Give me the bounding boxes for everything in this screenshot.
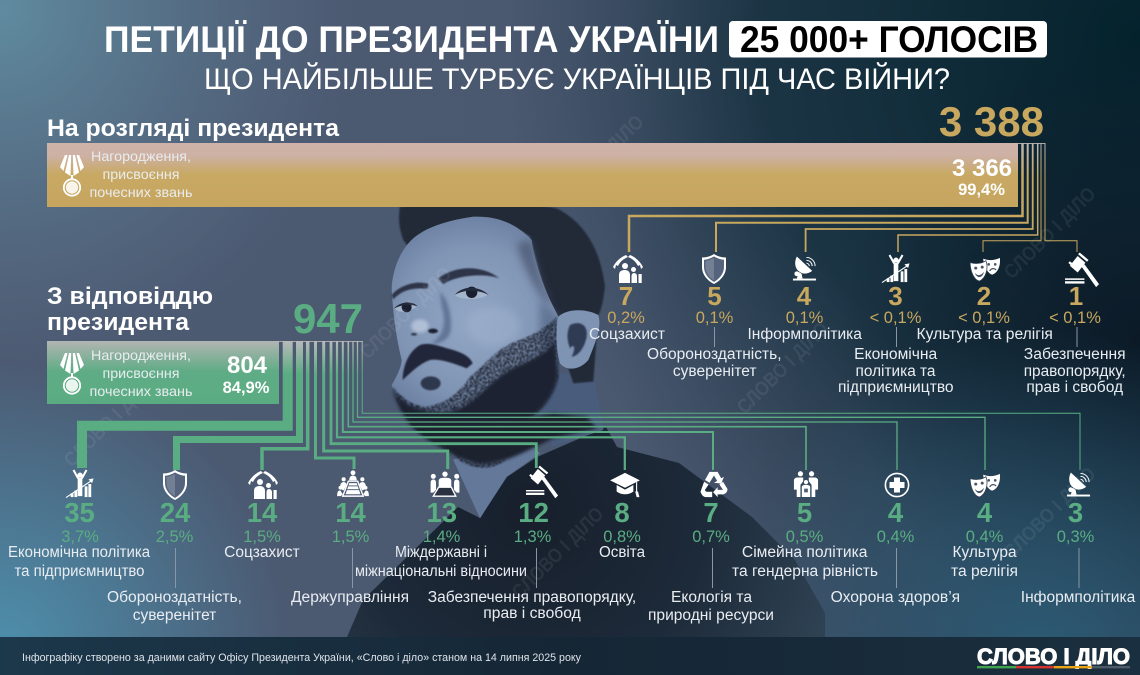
column: ecology: Екологія та	[671, 589, 752, 606]
column: education	[599, 473, 645, 561]
column: social protection (answered): 1,5%	[243, 528, 281, 546]
icon: satellite dish	[1067, 472, 1090, 496]
column: healthcare	[831, 473, 960, 606]
column: ecology	[648, 472, 774, 624]
title	[104, 19, 1047, 60]
column: international relations: 13	[427, 497, 457, 528]
column: culture (answered)	[951, 474, 1018, 580]
bar value: 84,9%	[223, 379, 270, 397]
column: education: Освіта	[599, 544, 645, 561]
column: defence (answered): 2,5%	[156, 528, 194, 546]
column: education: 0,8%	[603, 528, 641, 546]
icon: medical cross	[885, 473, 909, 497]
source note: Інфографіку створено за даними сайту Офісу Президента України, «Слово і діло» станом на 14 липня 2025 року	[22, 652, 581, 664]
column: defence (answered): суверенітет	[133, 607, 216, 624]
bar value: 3 366	[952, 155, 1012, 182]
column: defence (review): суверенітет	[673, 363, 756, 380]
column: social protection (answered)	[224, 471, 300, 561]
icon: social protection	[613, 255, 643, 283]
icon: satellite dish	[793, 256, 816, 280]
column: family policy	[732, 471, 878, 580]
column: public administration: 14	[335, 497, 366, 528]
column: information policy (review)	[747, 256, 862, 343]
gold connector lines	[629, 143, 1077, 252]
column: culture (review)	[916, 258, 1053, 343]
column: social protection (answered): Соцзахист	[224, 544, 300, 561]
total under review: 3 388	[939, 98, 1044, 145]
column: law and order (review): прав і свобод	[1026, 379, 1123, 396]
column: education: 8	[614, 497, 630, 528]
column: information policy (answered): Інформполітика	[1021, 589, 1136, 606]
column: culture (answered): Культура	[952, 544, 1017, 561]
column: family policy: 0,5%	[786, 528, 824, 546]
total answered: 947	[293, 295, 363, 342]
green connector lines	[82, 341, 1080, 470]
column: law and order (answered): 12	[518, 497, 549, 528]
column: healthcare: 4	[888, 497, 904, 528]
column: family policy: та гендерна рівність	[732, 563, 878, 580]
bar label: присвоєння	[102, 166, 180, 182]
column: information policy (review): 0,1%	[786, 309, 824, 327]
column: international relations: Міждержавні і	[395, 544, 487, 561]
bar: awards under review	[47, 143, 1018, 207]
bar value	[223, 352, 270, 397]
icon: theatre masks	[970, 474, 1000, 497]
column: culture (answered): та релігія	[951, 563, 1018, 580]
subtitle: ЩО НАЙБІЛЬШЕ ТУРБУЄ УКРАЇНЦІВ ПІД ЧАС ВІЙНИ?	[204, 62, 950, 96]
column: social protection (answered): 14	[247, 497, 278, 528]
bar label: Нагородження,	[91, 347, 191, 363]
column: law and order (answered): прав і свобод	[483, 605, 581, 622]
column: economy (review): політика та	[856, 363, 936, 380]
footer	[0, 637, 1140, 675]
column: defence (review): 5	[707, 281, 722, 311]
icon: meeting	[431, 471, 459, 496]
icon: medal	[60, 155, 84, 196]
column: culture (review): Культура та релігія	[916, 326, 1053, 343]
title: ПЕТИЦІЇ ДО ПРЕЗИДЕНТА УКРАЇНИ	[104, 19, 719, 60]
icon: economy growth	[882, 255, 910, 283]
column: economy (answered): Економічна політика	[8, 544, 150, 561]
watermarks: СЛОВО І ДІЛО	[548, 111, 648, 212]
column: international relations: міжнаціональні відносини	[355, 563, 527, 580]
column: international relations	[355, 471, 527, 580]
column: economy (review): 3	[888, 281, 903, 311]
column: international relations: 1,4%	[423, 528, 461, 546]
column: information policy (review): 4	[797, 281, 812, 311]
title: 25 000+ ГОЛОСІВ	[740, 19, 1038, 60]
column: defence (review): Обороноздатність,	[647, 346, 782, 363]
column: law and order (review): Забезпечення	[1024, 346, 1126, 363]
column: economy (review): < 0,1%	[870, 309, 922, 327]
icon: graduation cap	[610, 473, 640, 497]
column: social protection (review): Соцзахист	[589, 326, 665, 343]
bar value: 804	[227, 352, 268, 379]
portrait of the president	[347, 203, 825, 637]
logo: СЛОВО І ДІЛО	[977, 644, 1130, 669]
icon: social protection	[248, 471, 278, 499]
column: healthcare: Охорона здоров’я	[831, 589, 960, 606]
heading: answered: президента	[47, 309, 190, 336]
watermarks: СЛОВО І ДІЛО	[508, 503, 608, 604]
bar label: присвоєння	[102, 365, 180, 381]
column: law and order (review): < 0,1%	[1049, 309, 1101, 327]
column: law and order (review): 1	[1069, 281, 1083, 311]
heading: answered: З відповіддю	[47, 283, 213, 310]
icon: shield	[702, 254, 726, 284]
bar label	[90, 148, 192, 200]
column: economy (answered): 3,7%	[61, 528, 99, 546]
icon: gavel	[1065, 252, 1099, 287]
column: law and order (review): правопорядку,	[1024, 363, 1126, 380]
watermarks: СЛОВО І ДІЛО	[1000, 463, 1100, 564]
column: economy (answered)	[8, 470, 150, 580]
watermarks: СЛОВО І ДІЛО	[60, 371, 160, 472]
icon: economy growth	[66, 470, 94, 498]
column: public administration: Держуправління	[291, 589, 409, 606]
column: economy (answered): 35	[64, 497, 95, 528]
icon: theatre masks	[970, 258, 1000, 281]
column: public administration: 1,5%	[332, 528, 370, 546]
bar label: почесних звань	[90, 383, 192, 399]
bar label	[90, 347, 192, 399]
icon: family	[794, 471, 818, 497]
bar label: почесних звань	[90, 184, 192, 200]
icon: recycling	[700, 472, 728, 497]
column: culture (review): 2	[977, 281, 991, 311]
column: ecology: природні ресурси	[648, 607, 774, 624]
column: defence (review): 0,1%	[696, 309, 734, 327]
watermarks	[60, 111, 1100, 604]
column: ecology: 7	[703, 497, 719, 528]
column: defence (review)	[647, 254, 782, 380]
heading: answered	[47, 283, 213, 336]
column: defence (answered)	[107, 470, 242, 624]
column: law and order (answered): Забезпечення правопорядку,	[428, 589, 636, 606]
column: economy (review)	[838, 255, 954, 396]
heading: under review: На розгляді президента	[47, 115, 340, 142]
bar value: 99,4%	[958, 181, 1005, 199]
column: social protection (review)	[589, 255, 665, 343]
column: economy (review): підприємництво	[838, 379, 954, 396]
column: defence (answered): 24	[160, 497, 191, 528]
icon: boardroom table	[337, 470, 369, 496]
icon: medal	[60, 353, 84, 394]
column: healthcare: 0,4%	[877, 528, 915, 546]
column: social protection (review): 7	[619, 281, 633, 311]
column: culture (answered): 0,4%	[966, 528, 1004, 546]
column: culture (review): < 0,1%	[958, 309, 1010, 327]
column: information policy (answered)	[1021, 472, 1136, 606]
watermarks: СЛОВО І ДІЛО	[1000, 183, 1100, 284]
column: family policy: Сімейна політика	[742, 544, 868, 561]
icon: shield	[163, 470, 187, 500]
column: information policy (answered): 0,3%	[1057, 528, 1095, 546]
bar value	[952, 155, 1012, 199]
column: social protection (review): 0,2%	[607, 309, 645, 327]
column: defence (answered): Обороноздатність,	[107, 589, 242, 606]
column: family policy: 5	[797, 497, 812, 528]
icon: gavel	[526, 466, 558, 498]
column: ecology: 0,7%	[692, 528, 730, 546]
column: economy (review): Економічна	[854, 346, 938, 363]
column: public administration	[291, 470, 409, 606]
watermarks: СЛОВО І ДІЛО	[733, 318, 833, 419]
column: law and order (answered): 1,3%	[514, 528, 552, 546]
column: culture (answered): 4	[977, 497, 993, 528]
column: information policy (review): Інформполітика	[747, 326, 862, 343]
bar label: Нагородження,	[91, 148, 191, 164]
bar: awards answered	[47, 341, 279, 404]
column: economy (answered): та підприємництво	[14, 563, 144, 580]
column: information policy (answered): 3	[1068, 497, 1083, 528]
watermarks: СЛОВО І ДІЛО	[356, 263, 456, 364]
column: law and order (answered)	[428, 466, 636, 622]
column: law and order (review)	[1024, 252, 1126, 396]
